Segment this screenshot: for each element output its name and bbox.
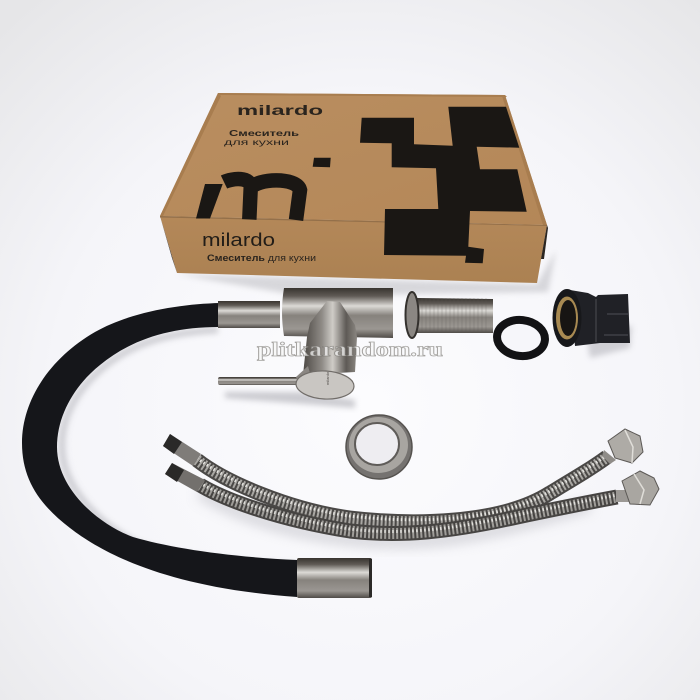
- spout stem: [218, 301, 280, 328]
- handle logo: milardo: [325, 371, 330, 385]
- upper left connector: [163, 434, 201, 466]
- faucet body: [218, 288, 393, 408]
- large m logo: [196, 179, 300, 220]
- subtitle on top face: для кухни: [224, 138, 289, 147]
- upper right nut: [602, 429, 643, 464]
- lever rod: [218, 377, 300, 385]
- black mounting fitting: [552, 289, 632, 358]
- upper braided hose: [197, 455, 607, 522]
- box shadow: [176, 250, 556, 296]
- flexible black hose: [22, 303, 372, 598]
- faucet shadows: [225, 392, 355, 408]
- fitting flange: [552, 289, 582, 347]
- black pixel pattern: [360, 107, 527, 263]
- braided water hoses: [163, 429, 659, 542]
- box flap edges: [160, 93, 547, 225]
- box front face: [160, 216, 547, 283]
- hose shadow: [62, 330, 297, 566]
- brass insert: [556, 296, 578, 340]
- product name on top face: Смеситель: [229, 128, 299, 138]
- product name on front face: Смеситель для кухни: [207, 253, 316, 264]
- tube flange: [406, 292, 418, 338]
- lower braided hose: [200, 483, 617, 533]
- box top face: [160, 93, 547, 225]
- black rubber gasket: [495, 318, 547, 358]
- tube threads: [422, 298, 486, 333]
- logo on top face: milardo: [237, 103, 323, 118]
- small black square: [313, 158, 331, 167]
- logo on front face: milardo: [202, 230, 275, 250]
- hose tube: [22, 303, 297, 597]
- threaded tube: [406, 292, 493, 338]
- vertical mixer body: [303, 301, 357, 375]
- chrome ring: [346, 415, 412, 479]
- watermark: plitkarandom.ru: [257, 339, 443, 361]
- handle head: [295, 370, 355, 400]
- lever neck: [296, 366, 314, 388]
- horizontal cylinder: [282, 288, 393, 338]
- lower left connector: [165, 463, 205, 492]
- cardboard box: [160, 93, 556, 296]
- lower right nut: [616, 471, 659, 505]
- fitting body: [570, 290, 630, 346]
- hose ferrule: [297, 558, 372, 598]
- hoses shadow: [200, 492, 590, 542]
